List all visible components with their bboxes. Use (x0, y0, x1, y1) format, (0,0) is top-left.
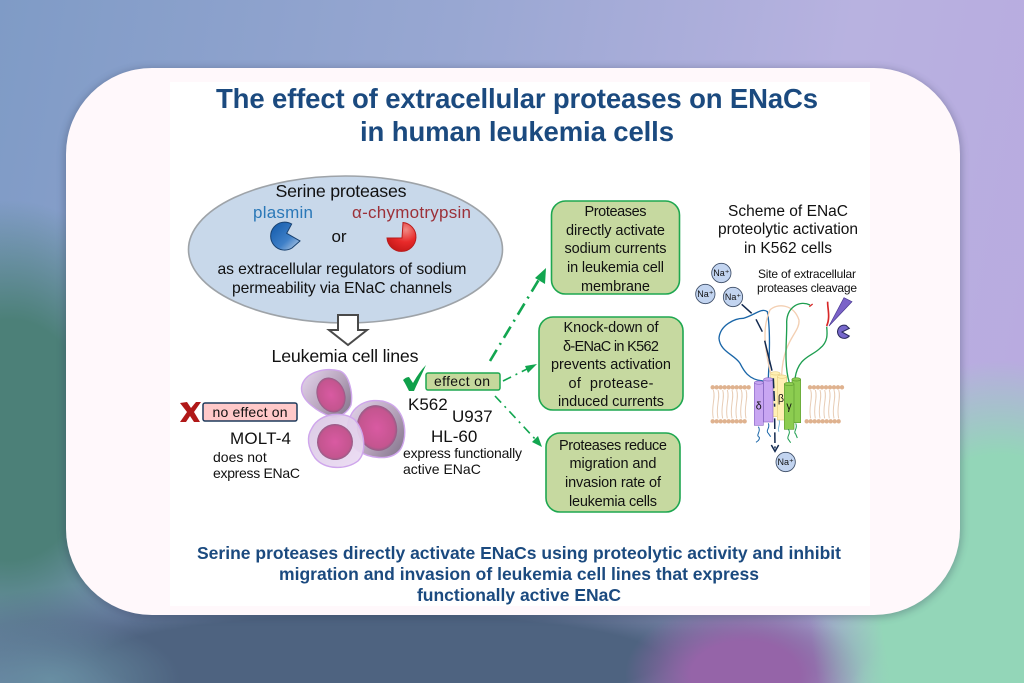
icon: red cross (180, 402, 201, 422)
panel: serine proteases ellipse (188, 176, 502, 323)
labels: responsive cell lines (408, 395, 493, 446)
heading: scheme of ENaC: proteolytic activation (718, 221, 858, 238)
conclusion: migration and invasion of leukemia cell lines that express (279, 564, 759, 584)
panel: result box 3: migration and (570, 456, 656, 472)
panel: result box 2: prevents activation (551, 357, 671, 373)
tails (756, 420, 797, 443)
panel: result box 2: of protease- (568, 376, 654, 392)
panel: result box 1: Proteases (584, 204, 646, 220)
panel: result box 3: invasion rate of (565, 475, 662, 491)
panel: result box 2: δ-ENaC in K562 (563, 339, 659, 355)
title: The effect of extracellular proteases on ENaCs (216, 83, 818, 114)
subunit letters: β (778, 393, 784, 405)
text: regulators: as extracellular regulators of sodium (218, 261, 466, 278)
diagram: ENaC channel scheme (696, 263, 852, 472)
arrow: hollow down (329, 315, 367, 345)
panel: result box 1: membrane (581, 279, 650, 295)
conclusion: functionally active ENaC (417, 585, 621, 605)
panel: result box 1: directly activate (566, 223, 665, 239)
labels: responsive cell lines: HL-60 (431, 427, 477, 446)
badge: no effect on: no effect on (212, 404, 288, 420)
text: express functionally (403, 445, 522, 477)
labels: responsive cell lines: U937 (452, 407, 493, 426)
label: plasmin: plasmin (253, 203, 313, 222)
text: express functionally: active ENaC (403, 461, 481, 477)
panel: result box 2 (539, 317, 683, 410)
arrow: to box 2 (503, 364, 537, 381)
label: MOLT-4: MOLT-4 (230, 429, 291, 448)
text: express functionally: express functionally (403, 445, 522, 461)
text: cleavage site (757, 267, 857, 295)
title (216, 83, 818, 147)
panel: result box 3: leukemia cells (569, 494, 657, 510)
text: does not express (213, 449, 300, 481)
conclusion (197, 543, 841, 605)
arrow: sodium path (742, 304, 779, 451)
membrane lipids (713, 387, 843, 421)
icon: green check (403, 365, 426, 391)
panel: result box 1 (552, 201, 680, 295)
loop: blue delta subunit (719, 310, 769, 381)
panel: result box 2: Knock-down of (564, 320, 659, 336)
panel: result box 1: sodium currents (564, 241, 666, 257)
subunit letters (756, 393, 792, 412)
heading: scheme of ENaC: in K562 cells (744, 240, 832, 257)
card shadow (64, 68, 962, 618)
arrow: to box 3 (495, 396, 542, 447)
subunit beta cylinders (771, 372, 787, 420)
panel: result box 1: in leukemia cell (567, 260, 664, 276)
icon: chymotrypsin pacman (387, 222, 416, 251)
labels: responsive cell lines: K562 (408, 395, 448, 414)
icon: plasmin pacman (271, 222, 300, 250)
sodium ions: Na⁺ (778, 457, 794, 467)
heading: serine proteases: Serine proteases (276, 181, 407, 201)
subunit delta cylinders (754, 378, 773, 425)
subunit gamma cylinders (784, 378, 801, 429)
text: does not express: does not (213, 449, 267, 465)
sodium ions: Na⁺ (713, 268, 730, 278)
text: cleavage site: Site of extracellular (758, 267, 856, 281)
heading: scheme of ENaC: Scheme of ENaC (728, 203, 848, 220)
heading: scheme of ENaC (718, 203, 858, 257)
label: or: or (331, 227, 347, 246)
subunit letters: δ (756, 400, 762, 412)
icon: leukemia cells (302, 370, 405, 467)
icon: cleavage blade (829, 298, 852, 326)
title: in human leukemia cells (360, 116, 674, 147)
sodium ions: Na⁺ (697, 289, 714, 299)
sodium ions: Na⁺ (725, 292, 741, 302)
panel: main card (66, 68, 960, 615)
panel: result box 2: induced currents (558, 394, 664, 410)
arrow: to box 1 (490, 268, 546, 361)
heading: leukemia cell lines: Leukemia cell lines (272, 346, 419, 366)
panel: result box 3: Proteases reduce (559, 438, 667, 454)
text: cleavage site: proteases cleavage (757, 281, 857, 295)
subunit letters: γ (786, 400, 792, 412)
panel: result box 3 (546, 433, 680, 512)
icon: protease pacman (838, 325, 849, 338)
panel: serine proteases ellipse: permeability via ENaC channels (232, 280, 452, 297)
loop: peach beta subunit (765, 306, 799, 375)
conclusion: Serine proteases directly activate ENaCs using proteolytic activity and inhibit (197, 543, 841, 563)
loop: green gamma subunit (786, 302, 829, 383)
text: does not express: express ENaC (213, 465, 300, 481)
sodium ions (696, 263, 795, 472)
label: alpha-chymotrypsin: α-chymotrypsin (352, 203, 471, 222)
badge: effect on: effect on (434, 373, 490, 389)
